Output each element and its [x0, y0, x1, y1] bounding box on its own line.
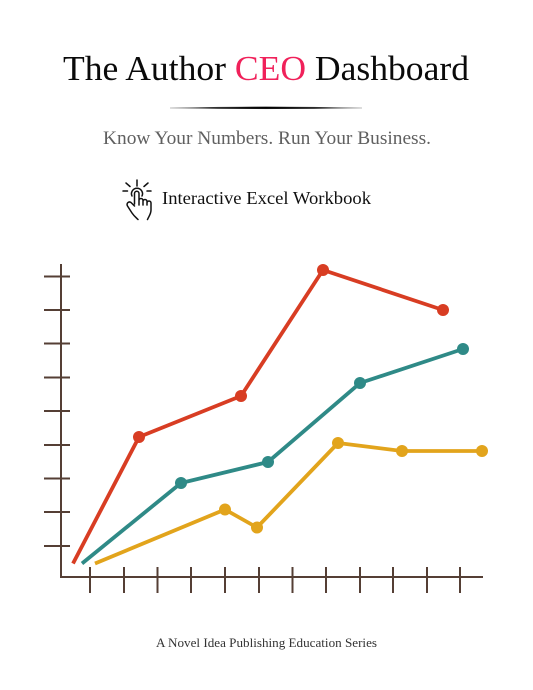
- line chart: [44, 264, 488, 593]
- series: red line: [73, 264, 449, 564]
- icon: tapping hand: [123, 180, 151, 220]
- title: The Author CEO Dashboard: [63, 49, 470, 88]
- title divider: [170, 107, 362, 109]
- workbook label: Interactive Excel Workbook: [162, 188, 371, 208]
- chart axes and tick marks: [44, 264, 483, 593]
- series: teal line: [82, 343, 469, 564]
- subtitle: Know Your Numbers. Run Your Business.: [103, 129, 431, 149]
- footer: A Novel Idea Publishing Education Series: [156, 636, 377, 650]
- series: yellow line: [95, 437, 488, 564]
